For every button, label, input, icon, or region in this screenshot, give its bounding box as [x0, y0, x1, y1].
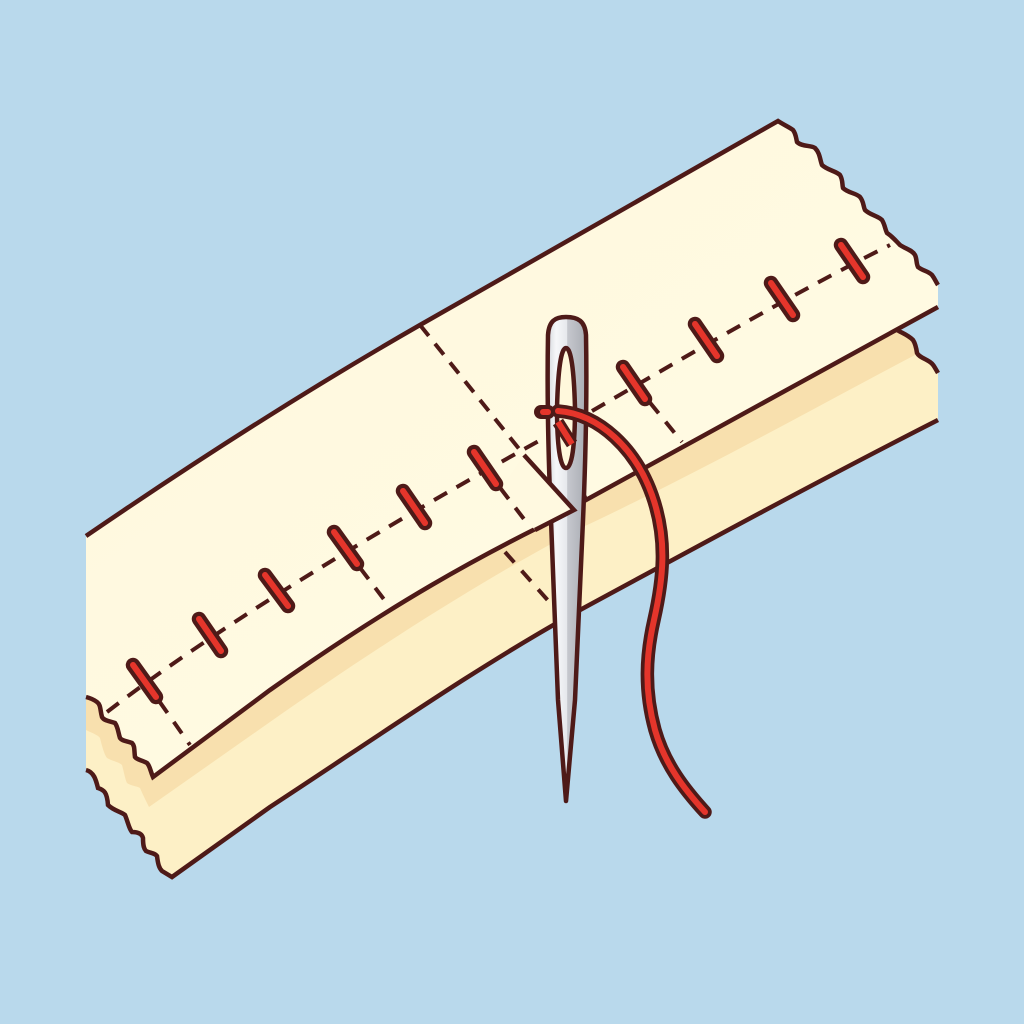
- shaded band under top layer: [86, 330, 915, 807]
- needle eye: [557, 348, 575, 468]
- red thread: [558, 411, 705, 812]
- needle: [548, 317, 586, 801]
- thread through needle eye: [541, 412, 572, 444]
- dashed stitch line: [107, 245, 890, 745]
- top fabric outline: [86, 121, 938, 536]
- lower fabric outline: [86, 420, 938, 877]
- lower fabric layer: [86, 330, 938, 877]
- fabric flap over needle: [500, 455, 574, 530]
- dashed cross seams: [145, 383, 682, 745]
- red surface stitches: [133, 245, 863, 697]
- lower layer dashed seam: [505, 552, 552, 605]
- top fabric layer: [86, 121, 938, 777]
- dashed fold line behind needle: [420, 325, 524, 455]
